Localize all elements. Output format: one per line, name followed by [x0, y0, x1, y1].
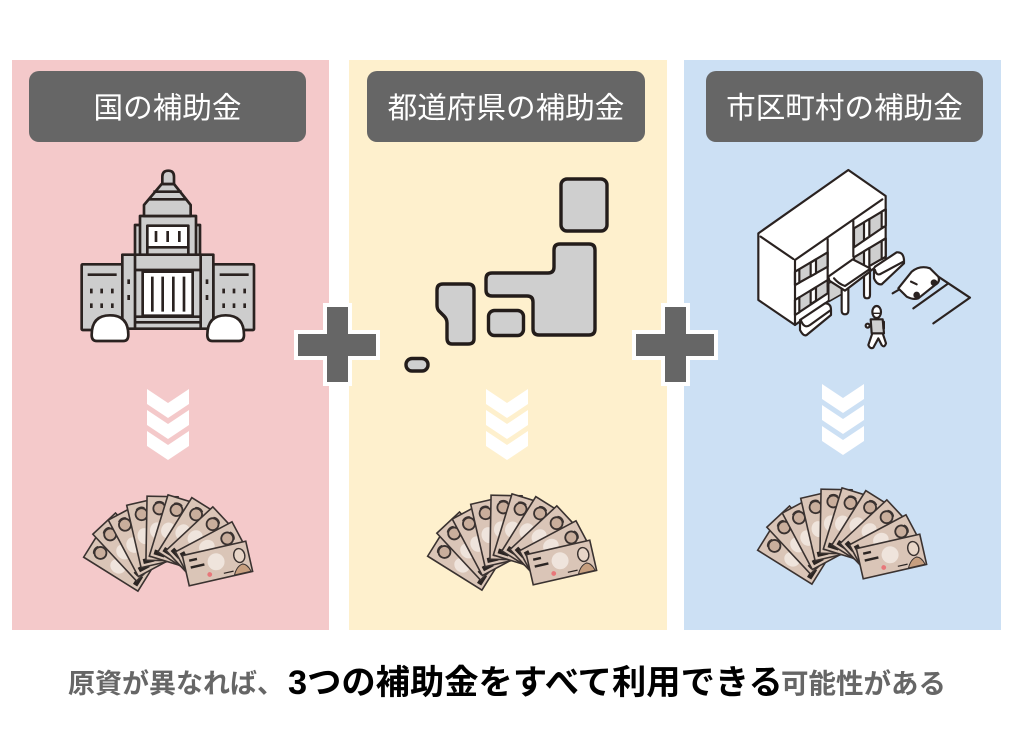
pedestrian — [868, 333, 886, 348]
caption: 可能性がある — [781, 668, 946, 699]
heading: national subsidy: 国の補助金 — [94, 92, 241, 125]
icon: chevrons prefectural — [486, 389, 528, 460]
heading: municipal subsidy — [706, 71, 983, 142]
parking lines — [893, 277, 970, 323]
caption: 3つの補助金をすべて利用できる — [288, 664, 783, 702]
heading: national subsidy — [29, 71, 306, 142]
canopy — [828, 259, 870, 291]
caption — [68, 664, 946, 702]
icon: chevrons municipal — [822, 384, 864, 455]
left planter — [800, 303, 831, 335]
icon: plus sign 2 — [636, 307, 714, 382]
icon: banknotes national — [84, 495, 253, 591]
icon: banknotes municipal — [758, 488, 927, 584]
icon: plus sign 1 — [298, 307, 376, 382]
window bands — [795, 209, 886, 315]
panel: national subsidy — [12, 60, 329, 630]
icon: chevrons national — [147, 389, 189, 460]
icon: banknotes prefectural — [428, 494, 597, 590]
car — [898, 267, 939, 299]
icon: parliament building — [82, 171, 254, 341]
pillars — [842, 268, 870, 314]
panel: prefectural subsidy — [349, 60, 667, 630]
heading: prefectural subsidy — [367, 71, 645, 142]
icon: municipal office with car and pedestrian — [758, 170, 970, 348]
mullions — [795, 209, 886, 315]
right planter — [874, 252, 904, 284]
heading: prefectural subsidy: 都道府県の補助金 — [388, 92, 624, 125]
heading: municipal subsidy: 市区町村の補助金 — [726, 92, 963, 125]
building body — [758, 170, 886, 325]
panel: municipal subsidy — [684, 60, 1001, 630]
lower entrance — [829, 275, 843, 302]
caption: 原資が異なれば、 — [68, 669, 284, 699]
icon: map of Japan — [406, 179, 607, 371]
